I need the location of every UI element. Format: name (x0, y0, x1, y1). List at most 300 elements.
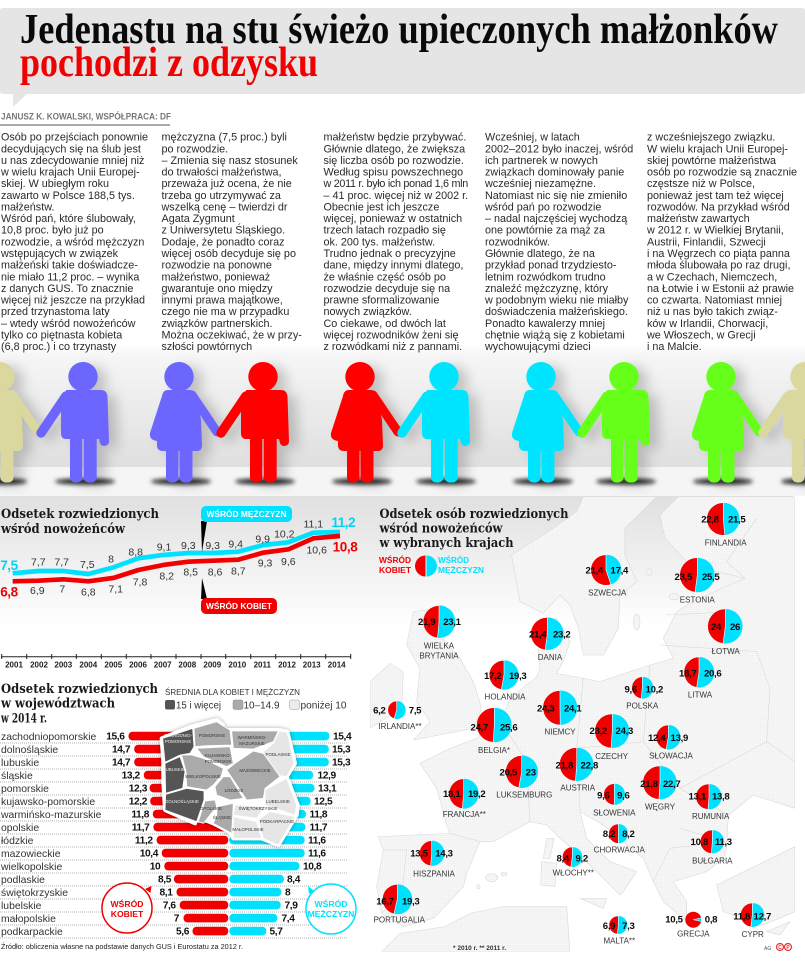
year axis: 2014 (328, 660, 346, 670)
pie: Hiszpania: 14,3 (435, 848, 453, 859)
pie: Litwa (679, 657, 721, 699)
women values: 7,8 (133, 577, 147, 589)
pie: Dania: DANIA (538, 653, 563, 662)
pie: Finlandia: FINLANDIA (705, 539, 747, 548)
pie: Francja: 19,2 (468, 789, 485, 800)
men values: 11,1 (303, 518, 323, 530)
men values: 11,6 (308, 849, 326, 860)
year axis: 2004 (79, 660, 98, 670)
pie: Belgia: 25,6 (500, 723, 517, 734)
men values: 9,3 (205, 540, 220, 552)
article text: column 5: Austrii, Finlandii, Szwecji (647, 236, 766, 248)
province names: śląskie (1, 771, 33, 782)
men values: 11,6 (308, 836, 326, 847)
article text: column 5: na Łotwie i w Estonii aż prawie (647, 283, 794, 295)
women values: 10,4 (140, 849, 159, 860)
article text: column 2: do trwałości małżeństwa, (162, 167, 282, 179)
pie: Cypr (733, 903, 771, 939)
voivodeship heading (0, 682, 158, 727)
article text: column 1: Osób po przejściach ponownie (1, 132, 148, 144)
pie: Estonia: ESTONIA (680, 595, 715, 604)
pie: Hiszpania (410, 841, 455, 878)
pie: Grecja: 0,8 (705, 914, 718, 925)
callout: among women (201, 578, 277, 614)
title banner (0, 7, 805, 107)
article text: column 5: rozwodów. Na przykład wśród (647, 201, 790, 213)
map legend: 10–14.9 (244, 700, 280, 712)
province names: łódzkie (1, 836, 34, 847)
pie: Wielka Brytania: BRYTANIA (419, 651, 459, 660)
row dividers (0, 743, 347, 938)
article text: column 2: Dodaje, że ponadto coraz (162, 236, 285, 248)
pie: Szwecja: 17,4 (611, 566, 629, 577)
article text: column 4: one powtórnie za mąż za (485, 225, 605, 237)
figure band background (0, 345, 805, 496)
men values: 11,7 (310, 823, 328, 834)
article text: column 2: – Zmienia się nasz stosunek (162, 155, 298, 167)
province labels on map: PODKARPACKIE (260, 819, 294, 824)
province labels on map: DOLNOŚLĄSKIE (165, 799, 199, 804)
article text: column 2: szłości powtórnych (162, 341, 252, 353)
pie: Belgia: BELGIA* (478, 746, 510, 755)
men values: 15,4 (333, 732, 352, 743)
article text: column 3: Obecnie jest ich jeszcze (324, 201, 439, 213)
pie: Portugalia: PORTUGALIA (374, 916, 426, 925)
men values: 9,4 (228, 538, 243, 550)
pie: Włochy: WŁOCHY** (553, 869, 594, 878)
women values: 5,6 (176, 927, 190, 938)
map legend (165, 688, 347, 712)
pie: Słowenia: 9,6 (617, 791, 630, 802)
province labels on map (163, 733, 294, 832)
callout: men circle: MĘŻCZYZN (308, 909, 354, 919)
pie: Litwa: LITWA (688, 690, 713, 699)
pie: Włochy: 8,4 (556, 854, 570, 865)
men values: 7,4 (282, 914, 295, 925)
province names: podlaskie (1, 875, 45, 886)
voivodeship heading: w województwach (0, 697, 115, 712)
men values: 8 (285, 888, 291, 899)
pie: Wielka Brytania: 21,9 (418, 617, 435, 628)
article text: column 3: trzech latach rozpadło się (324, 225, 446, 237)
women values: 6,8 (0, 584, 19, 600)
map legend: poniżej 10 (300, 700, 347, 712)
article text: column 2: Można oczekiwać, że w przy- (162, 329, 302, 341)
year axis: 2002 (30, 660, 48, 670)
pie: Irlandia: 6,2 (373, 706, 386, 717)
article text: column 1: (6,8 proc.) i co trzynasty (1, 341, 117, 353)
pie: Irlandia: 7,5 (409, 706, 422, 717)
pie: Wielka Brytania (418, 605, 462, 660)
article text: column 4: Głównie dlatego, że na (485, 248, 595, 260)
line chart heading: Odsetek rozwiedzionych (1, 507, 159, 522)
credits: P (786, 945, 790, 951)
article text: column 4: przykład ponad trzydziesto- (485, 260, 617, 272)
article text: column 5: a w Czechach, Niemczech, (647, 271, 777, 283)
pie: Holandia: 19,3 (509, 671, 526, 682)
article text: column 5: i na Malcie. (647, 341, 702, 353)
year axis: 2008 (178, 660, 197, 670)
article text: column 3: więcej rozwodników żeni się (322, 329, 459, 341)
article text: column 2: po rozwodzie. (162, 143, 228, 155)
article text: column 4: Natomiast nic się nie zmieniło (485, 190, 627, 202)
women values: 10,6 (306, 544, 327, 556)
pie: Niemcy: 24,3 (537, 704, 554, 715)
article text: column 3: że właśnie część osób po (324, 271, 446, 283)
article text: column 2: trzeba go utrzymywać za (162, 190, 281, 202)
cyan bars: men (229, 732, 329, 935)
pie: Włochy (553, 847, 594, 878)
province labels on map: PODLASKIE (266, 752, 291, 757)
province labels on map: KUJAWSKO- (205, 753, 231, 758)
men values: 8 (108, 553, 114, 565)
pie: Czechy: 23,2 (590, 726, 607, 737)
women values: 8,2 (159, 571, 174, 583)
lower section background (0, 496, 794, 626)
men values: 8,8 (128, 547, 143, 559)
men values: 11,2 (331, 515, 355, 530)
pie: Rumunia: 13,8 (712, 792, 730, 803)
pie: Polska: 9,6 (624, 684, 637, 695)
credits: C (778, 945, 782, 951)
article text: column 3: Co ciekawe, od dwóch lat (324, 318, 446, 330)
pie: Finlandia: 22,8 (701, 514, 720, 525)
article text: column 4: Ponadto kawalerzy mniej (485, 318, 605, 330)
pie: Węgry: 22,7 (663, 779, 680, 790)
article text: column 3: – 41 proc. więcej niż w 2002 r. (324, 190, 468, 202)
article text: column 1: małżeński takie doświadcze- (1, 260, 138, 272)
province names: świętokrzyskie (1, 888, 68, 899)
article text: column 3: dane, między innymi dlatego, (324, 260, 463, 272)
pie: Chorwacja: CHORWACJA (594, 846, 646, 855)
pie: Niemcy (537, 690, 582, 736)
pie: Francja: 18,1 (443, 789, 461, 800)
pie: Niemcy: NIEMCY (544, 727, 576, 736)
pie: Szwecja: 21,4 (586, 566, 604, 577)
Europe panel heading: w wybranych krajach (379, 536, 514, 551)
article text: column 2: gwarantuje ono między (162, 283, 273, 295)
pie: Estonia: 23,5 (675, 572, 693, 583)
pie: Finlandia (701, 503, 747, 548)
article text: column 4: ich partnerek w nowych (485, 155, 598, 167)
women values: 8,5 (158, 875, 172, 886)
credits (764, 944, 792, 952)
province labels on map: POMORSKIE (199, 733, 225, 738)
article text: column 1: przed trzynastoma laty (1, 306, 110, 318)
callout: men circle (306, 884, 356, 934)
year axis: 2003 (54, 660, 73, 670)
callout: women circle: KOBIET (111, 909, 144, 919)
article text: column 5: częstsze niż w Polsce, (647, 178, 755, 190)
women values: 7,6 (163, 901, 176, 912)
article text: column 1: małżeństw. (1, 201, 54, 213)
men values: 13,1 (318, 784, 337, 795)
province labels on map: MAZOWIECKIE (239, 768, 271, 773)
pie: Słowacja (648, 725, 694, 761)
pie: Austria (556, 748, 599, 793)
province names: opolskie (1, 823, 39, 834)
pie: Szwecja: SZWECJA (588, 589, 627, 598)
women values: 6,8 (81, 586, 96, 598)
men values: 12,9 (318, 771, 336, 782)
article text: column 4: wśród pań po rozwodzie (484, 201, 601, 213)
province labels on map: OPOLSKIE (200, 806, 222, 811)
article text: column 1: 10,8 proc. było już po (1, 225, 104, 237)
footnote: * 2010 r. ** 2011 r. (453, 945, 506, 952)
pie: Cypr: 11,8 (733, 912, 751, 923)
article text: column 3: małżeństw będzie przybywać. (324, 132, 466, 144)
callout: women circle: WŚRÓD (111, 898, 143, 909)
year axis: 2007 (154, 660, 172, 670)
article text: column 1: z danych GUS. To znacznie (1, 283, 133, 295)
article text: column 4: wychowującymi dzieci (484, 341, 591, 353)
pie: Bułgaria: 11,3 (715, 837, 732, 848)
men values: 7,5 (80, 559, 95, 571)
article text: column 5: osób po rozwodzie są znacznie (647, 167, 797, 179)
callout: among men: WŚRÓD MĘŻCZYZN (206, 508, 287, 519)
map of Europe background (370, 497, 795, 952)
article text: column 3: Według spisu powszechnego (324, 167, 463, 179)
pie: Chorwacja: 8,2 (622, 829, 635, 840)
pie: Belgia: 24,7 (471, 723, 488, 734)
series lines (13, 532, 340, 581)
province names: dolnośląskie (1, 745, 58, 756)
article text: column 1: tylko co piętnasta kobieta (1, 329, 122, 341)
article text: column 1: skiej. W ubiegłym roku (1, 178, 109, 190)
callout: among men (201, 506, 292, 552)
pie: Niemcy: 24,1 (564, 704, 582, 715)
pie: Luksemburg: LUKSEMBURG (496, 790, 552, 799)
pie: Austria: 22,8 (581, 760, 599, 771)
pie: Słowacja: SŁOWACJA (649, 752, 694, 761)
pie: Francja: FRANCJA** (443, 810, 486, 819)
province labels on map: WARMIŃSKO- (238, 735, 267, 740)
pie: Irlandia (373, 701, 422, 731)
pie: Bułgaria: BUŁGARIA (692, 857, 733, 866)
province names: wielkopolskie (0, 862, 62, 873)
women values: 7 (59, 583, 65, 595)
women values: 14,7 (112, 758, 131, 769)
pie: Łotwa: 26 (730, 622, 740, 633)
article text: column 5: we Włoszech, w Grecji (646, 329, 756, 341)
article text: column 3: się liczba osób po rozwodzie. (324, 155, 464, 167)
year axis (1, 654, 351, 670)
article text: column 4: wcześniej niezamężne. (484, 178, 596, 190)
voivodeship heading: w 2014 r. (0, 712, 47, 727)
article text: column 3: rozwodzie decyduje się na (324, 283, 450, 295)
pie: Dania: 23,2 (553, 630, 570, 641)
pie: Czechy: CZECHY (595, 752, 629, 761)
men values: 15,3 (332, 745, 351, 756)
line chart heading (0, 507, 159, 537)
title banner: pochodzi z odzysku (20, 40, 318, 86)
article text: column 4: znaleźć mężczyznę, który (485, 283, 609, 295)
article text: column 3: Głównie dlatego, że zwiększa (324, 143, 465, 155)
women values: 12,3 (129, 784, 148, 795)
pie: Litwa: 20,6 (704, 668, 721, 679)
province names: małopolskie (1, 914, 56, 925)
Europe legend: WŚRÓD (379, 556, 411, 565)
province names: lubuskie (1, 758, 39, 769)
article text: column 5: ponieważ jest tam też więcej (647, 190, 784, 202)
province labels on map: ŚLĄSKIE (213, 815, 231, 820)
pie: Polska: 10,2 (646, 684, 663, 695)
men values: 7,5 (0, 558, 19, 573)
pie: Portugalia: 19,3 (402, 896, 419, 907)
province names (0, 732, 102, 938)
province labels on map: LUBELSKIE (266, 799, 290, 804)
article text: column 2: z Uniwersytetu Śląskiego. (162, 224, 285, 237)
article text: column 4: chętnie wiążą się z kobietami (485, 329, 625, 341)
pie: Czechy (590, 714, 633, 761)
article text: column 1: u nas zdecydowanie mniej niż (1, 155, 144, 167)
article text: column 2: przeważa już ocena, że nie (162, 178, 292, 190)
men values: 15,3 (332, 758, 351, 769)
article text: column 4: – nadal najczęściej wychodzą (485, 213, 627, 225)
pie: Włochy: 9,2 (575, 854, 588, 865)
women values: 7 (174, 914, 180, 925)
pie: Grecja: 10,5 (665, 914, 684, 925)
women values: 8,1 (160, 888, 173, 899)
pie: Holandia (484, 660, 526, 701)
women values: 10 (150, 862, 161, 873)
province names: pomorskie (1, 784, 49, 795)
illustration: row of people holding hands (0, 362, 805, 486)
men values: 10,2 (274, 528, 295, 540)
pie: Irlandia: IRLANDIA** (378, 722, 422, 731)
province labels on map: WIELKOPOLSKIE (185, 774, 221, 779)
map legend: 15 i więcej (176, 700, 221, 712)
article text: column 2: rozwodzie na ponowne (162, 260, 272, 272)
men values: 11,8 (310, 810, 328, 821)
callout: among women: WŚRÓD KOBIET (206, 600, 273, 611)
province names: podkarpackie (1, 927, 63, 938)
women values: 8,5 (183, 567, 198, 579)
article text: column 3: więcej, ponieważ w ostatnich (322, 213, 462, 225)
men values: 8,4 (287, 875, 301, 886)
article text: column 2: związków partnerskich. (162, 318, 273, 330)
province names: warmińsko-mazurskie (0, 810, 102, 821)
pie: Hiszpania: 13,5 (410, 848, 429, 859)
women values (0, 540, 358, 600)
article text: column 1: więcej niż jeszcze na przykład (0, 295, 145, 307)
article text: column 4: Wcześniej, w latach (485, 132, 580, 144)
year axis: 2012 (278, 660, 296, 670)
women values: 13,2 (122, 771, 141, 782)
pie: Dania (529, 617, 570, 662)
pie: Węgry: WĘGRY (645, 802, 676, 811)
pie: Cypr: 12,7 (754, 912, 771, 923)
line chart heading: wśród nowożeńców (0, 522, 126, 537)
credits: AG (764, 946, 771, 952)
pie: Francja (443, 779, 486, 819)
pie: Rumunia (689, 784, 730, 821)
article text: column 3: w 2011 r. było ich ponad 1,6 mln (322, 178, 468, 190)
men values: 9,3 (181, 540, 196, 552)
women values (106, 732, 190, 938)
article text: column 5: młoda ślubowała po raz drugi, (647, 260, 790, 272)
article text: column 5: skiej powtórne małżeństwa (647, 155, 776, 167)
pie: Szwecja (586, 555, 629, 598)
pie: Polska (624, 677, 663, 710)
pie: Słowenia: 9,6 (597, 791, 610, 802)
women values: 9,6 (281, 556, 296, 568)
article text: column 2: małżeństwo, ponieważ (162, 271, 270, 283)
pie: Łotwa (708, 609, 743, 656)
pie: Cypr: CYPR (742, 930, 764, 939)
pie: Austria: 21,8 (556, 760, 574, 771)
pie: Estonia (675, 558, 720, 604)
men values: 12,5 (314, 797, 333, 808)
men values: 7,7 (31, 557, 46, 569)
callout: women circle (102, 883, 152, 933)
Europe legend (379, 556, 484, 576)
article text: column 2: więcej osób decyduje się po (160, 248, 296, 260)
pie: Chorwacja: 8,2 (603, 829, 615, 840)
pie: Luksemburg (496, 755, 552, 799)
article text: column 4: 2002–2012 było inaczej, wśród (485, 143, 633, 155)
province labels on map: MAŁOPOLSKIE (232, 827, 264, 832)
article text: column 4: rozwodników. (485, 236, 550, 248)
pie: Holandia: 17,2 (484, 671, 501, 682)
year axis: 2005 (104, 660, 123, 670)
article text: column 4: doświadczenia małżeńskiego. (485, 306, 628, 318)
pie: Grecja: GRECJA (677, 930, 710, 939)
pie: Wielka Brytania: WIELKA (424, 642, 455, 651)
pie: Luksemburg: 23 (526, 767, 536, 778)
pie: Luksemburg: 20,5 (500, 767, 518, 778)
Europe panel heading: Odsetek osób rozwiedzionych (380, 507, 569, 522)
article text: column 5: i na Węgrzech co piąta panna (647, 248, 790, 260)
article text: column 5: ków w Irlandii, Chorwacji, (647, 318, 768, 330)
province names: lubelskie (1, 901, 42, 912)
women values: 14,7 (112, 745, 131, 756)
article text: column 5: W wielu krajach Unii Europej- (647, 143, 788, 155)
article text: column 5: z wcześniejszego związku. (647, 132, 775, 144)
pie: Słowacja: 13,9 (671, 733, 688, 744)
province labels on map: ŁÓDZKIE (225, 788, 243, 793)
pie: Łotwa: 24 (711, 622, 722, 633)
pie: Portugalia (374, 884, 426, 925)
Europe legend: WŚRÓD (438, 556, 469, 565)
men values: 9,9 (255, 533, 270, 545)
women values: 11,2 (135, 836, 153, 847)
women values: 8,7 (231, 566, 246, 578)
Europe panel heading (379, 507, 569, 551)
article text: column 2: wszelką cenę – twierdzi dr (160, 201, 288, 213)
province labels on map: POMORSKIE (205, 759, 231, 764)
article text: column 3: z rozwódkami niż z pannami. (324, 341, 462, 353)
article text: column 3: nowych związków. (324, 306, 412, 318)
source note: Źródło: obliczenia własne na podstawie danych GUS i Eurostatu za 2012 r. (1, 942, 243, 951)
article text: column 5: niż u nas było takich związ- (647, 306, 778, 318)
women values: 11,8 (131, 810, 150, 821)
men values: 5,7 (270, 927, 283, 938)
pie: Dania: 21,4 (529, 630, 547, 641)
women values: 11,7 (132, 823, 150, 834)
byline: JANUSZ K. KOWALSKI, WSPÓŁPRACA: DF (1, 110, 171, 122)
pie: Rumunia: RUMUNIA (692, 812, 730, 821)
article text: column 2: Agata Zygmunt (162, 213, 235, 225)
Europe panel heading: wśród nowożeńców (379, 522, 503, 536)
pie: Belgia (471, 708, 517, 755)
article text: column 1: wstępujących w związek (0, 248, 119, 260)
men values (270, 732, 352, 938)
article text: column 3: ok. 200 tys. małżeństw. (324, 236, 435, 248)
article text: column 2: czego nie ma w przypadku (162, 306, 289, 318)
year axis: 2010 (228, 660, 247, 670)
year axis: 2009 (203, 660, 222, 670)
